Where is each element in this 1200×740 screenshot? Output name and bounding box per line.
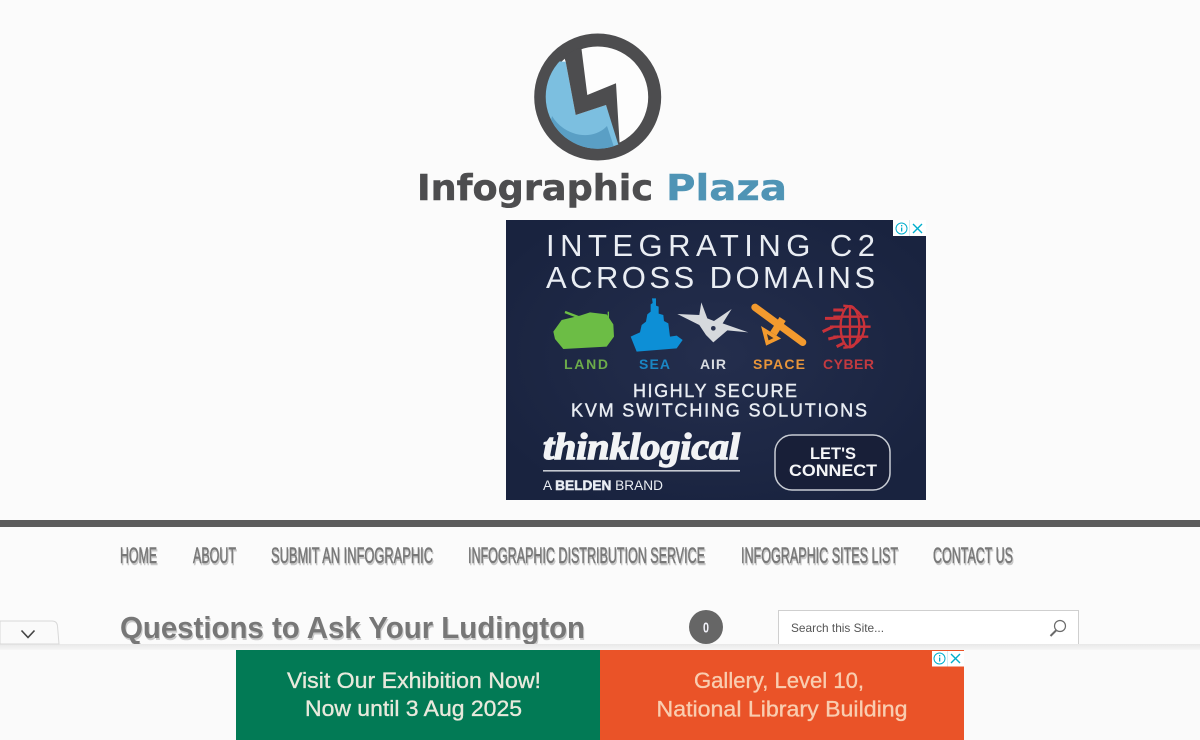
brand: thinklogical: thinklogical xyxy=(543,427,741,468)
brand: thinklogical xyxy=(543,427,741,493)
bottom ad: green panel: Visit Our Exhibition Now! xyxy=(287,668,541,693)
collapse tab with chevron xyxy=(0,621,59,644)
navigation top bar xyxy=(0,520,1200,527)
article title: Questions to Ask Your Ludington xyxy=(120,610,585,645)
brand: thinklogical: A BELDEN BRAND xyxy=(543,478,663,493)
domain labels: SPACE xyxy=(753,356,805,372)
bottom ad: orange panel xyxy=(600,650,964,740)
search box xyxy=(778,610,1078,660)
logo wordmark: Plaza: Plaza xyxy=(666,168,787,209)
ad headline: ACROSS DOMAINS xyxy=(546,260,875,295)
ad choices icons xyxy=(893,220,926,236)
navigation menu: ABOUT xyxy=(193,543,236,568)
icon: jet xyxy=(677,302,748,342)
bottom ad: green panel xyxy=(236,650,600,740)
icon: lightning bolt in ring xyxy=(535,40,655,154)
bottom ad choices icons xyxy=(932,651,964,666)
logo: Infographic Plaza xyxy=(417,40,787,209)
ad subheading: KVM SWITCHING SOLUTIONS xyxy=(571,400,867,420)
logo wordmark: Infographic: Infographic xyxy=(417,168,653,209)
button: Let's Connect xyxy=(775,435,890,490)
search box: Search this Site... xyxy=(791,621,884,635)
icon: satellite xyxy=(755,307,803,343)
icon: cyber globe xyxy=(823,306,871,348)
bottom ad: green panel: Now until 3 Aug 2025 xyxy=(305,696,522,721)
domain labels: CYBER xyxy=(823,356,874,372)
navigation menu: SUBMIT AN INFOGRAPHIC xyxy=(271,543,433,568)
navigation menu: HOME xyxy=(120,543,157,568)
icon: tank xyxy=(553,312,614,349)
domain icons xyxy=(553,298,871,352)
navigation menu: INFOGRAPHIC SITES LIST xyxy=(741,543,898,568)
button: Let's Connect: LET'S xyxy=(810,444,856,463)
advertisement banner: Integrating C2 xyxy=(506,220,926,500)
bottom ad: orange panel: National Library Building xyxy=(656,696,908,722)
icon: magnifier xyxy=(1050,620,1066,636)
comment count badge: 0 xyxy=(703,620,709,636)
ad headline xyxy=(546,228,875,295)
domain labels: LAND xyxy=(564,356,608,372)
bottom ad: orange panel: Gallery, Level 10, xyxy=(694,668,864,693)
button: Let's Connect: CONNECT xyxy=(789,461,878,480)
domain labels xyxy=(564,356,874,372)
icon: ship xyxy=(631,298,683,352)
navigation menu xyxy=(120,543,1013,568)
domain labels: AIR xyxy=(700,356,726,372)
domain labels: SEA xyxy=(639,356,670,372)
comment count badge xyxy=(689,610,723,644)
navigation menu: CONTACT US xyxy=(933,543,1013,568)
bottom sticky overlay xyxy=(0,621,1200,740)
navigation menu: INFOGRAPHIC DISTRIBUTION SERVICE xyxy=(468,543,705,568)
ad headline: INTEGRATING C2 xyxy=(546,228,875,263)
ad subheading: HIGHLY SECURE xyxy=(633,381,797,401)
ad subheading xyxy=(571,381,867,420)
